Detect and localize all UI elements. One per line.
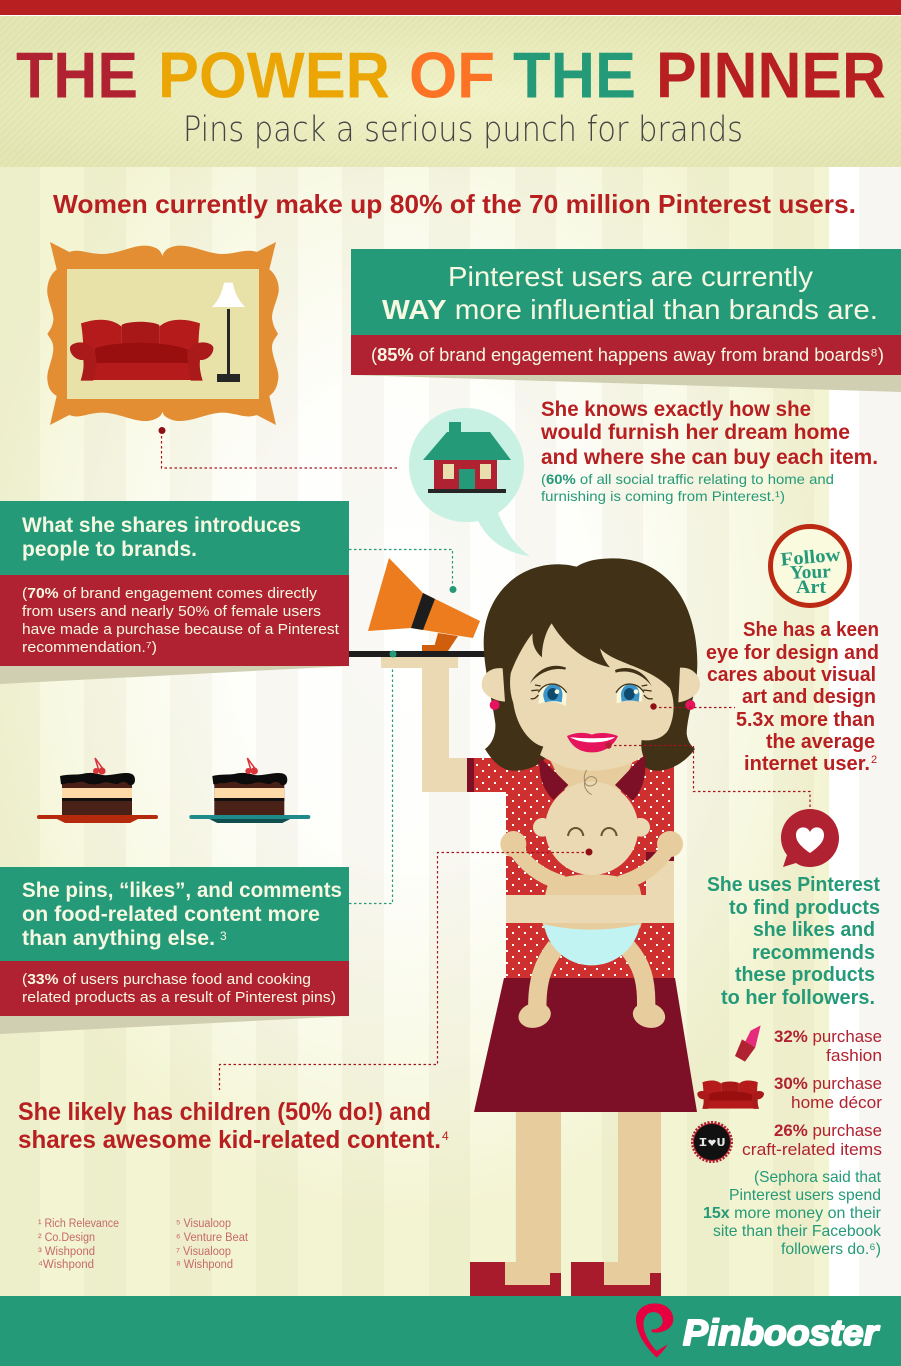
followers text: She uses Pinterest [707,874,880,896]
badge: follow your art [770,526,850,606]
neck [550,760,633,793]
purchase stats: 32% purchase [774,1027,882,1046]
footnotes: ⁶ Venture Beat [176,1232,249,1244]
logo wordmark: Pinbooster [683,1312,880,1353]
baby body [542,874,643,932]
header band [0,16,901,167]
megaphone [368,558,480,651]
icon: I love you badge: I♥U [698,1137,726,1150]
badge: follow your art: Your [789,561,832,584]
footnotes: ⁵ Visualoop [176,1218,231,1230]
dotted connector: frame to house [158,427,398,468]
band text: WAY more influential than brands are. [382,294,878,325]
dotted connector: shares to megaphone [349,550,456,593]
panel heading: people to brands. [22,538,197,561]
panel body: from users and nearly 50% of female users [22,603,321,620]
panel shadow [0,666,349,684]
purchase stats [742,1027,882,1159]
diaper [544,924,640,965]
food body: (33% of users purchase food and cooking [22,971,311,988]
left eye [531,684,567,706]
speech bubble with house [409,408,530,556]
head [482,558,700,801]
dream home text: She knows exactly how she [541,398,811,421]
ears [482,668,505,702]
icon: small sofa [697,1081,764,1109]
icon: I love you badge [693,1123,731,1161]
legs and shoes [470,1112,661,1296]
purchase stats: home décor [791,1093,882,1112]
dot on arm connector [390,650,396,658]
baby legs [537,947,646,1010]
panel body: (70% of brand engagement comes directly [22,585,318,602]
visual art text: internet user. [744,753,870,775]
raised arm and tray [349,651,489,792]
panel body: have made a purchase because of a Pinterest [22,621,340,638]
panel: what she shares [0,501,349,684]
footnotes: ² Co.Design [38,1232,95,1244]
dream home text: would furnish her dream home [540,421,850,444]
headline: Women currently make up 80% of the 70 million Pinterest users. [53,189,856,219]
floor lamp [212,283,245,382]
green band: influence [351,249,901,392]
badge: follow your art: Follow [780,544,842,571]
logo pin [636,1303,673,1358]
visual art text: eye for design and [706,642,879,664]
eyebrows [530,666,566,683]
panel body: recommendation.⁷) [22,639,157,656]
children text: shares awesome kid-related content. [18,1126,441,1154]
purchase stats: craft-related items [742,1140,882,1159]
visual art text: She has a keen [743,619,879,641]
right eye [616,683,653,703]
visual art text [706,619,879,775]
sephora note [703,1169,882,1258]
food panel shadow [0,1016,349,1034]
dream home text [540,398,878,504]
title: POWER [158,38,390,112]
bubble [409,408,530,556]
dream home text: (60% of all social traffic relating to home and [541,471,834,487]
footnotes: ⁴Wishpond [38,1259,94,1271]
baby feet [516,999,553,1031]
footnotes: ¹ Rich Relevance [38,1218,119,1230]
followers text: recommends [752,942,875,964]
food heading [22,879,342,950]
baby arms [513,845,670,883]
food heading: She pins, “likes”, and comments [22,879,342,902]
followers text: she likes and [753,919,875,941]
sephora note: site than their Facebook [713,1223,882,1240]
food heading: 3 [220,929,227,943]
dotted connector: lips to heart [605,742,810,808]
polka dot blouse [474,758,674,978]
top bar [0,0,901,15]
sephora note: (Sephora said that [754,1169,882,1186]
title: PINNER [656,38,886,112]
dream home text: furnishing is coming from Pinterest.¹) [541,488,785,504]
woman figure [349,558,700,1296]
carrying arm [646,852,674,896]
sephora note: Pinterest users spend [729,1187,881,1204]
followers text: these products [735,964,875,986]
frame [47,242,279,425]
earrings [490,700,500,710]
subtitle: Pins pack a serious punch for brands [183,110,743,150]
footnotes: ⁸ Wishpond [176,1259,233,1271]
footnotes: ⁷ Visualoop [176,1246,231,1258]
face [510,623,674,771]
footnotes: ³ Wishpond [38,1246,95,1258]
band shadow [351,375,901,392]
followers text: to her followers. [721,987,875,1009]
band text: Pinterest users are currently [448,261,813,292]
panel heading: What she shares introduces [22,514,301,537]
dotted connector: baby to children text [220,848,592,1090]
baby head [533,770,650,875]
children text: 4 [442,1129,449,1143]
dotted connector: cheek to art text [650,703,735,710]
icon: lipstick [735,1025,761,1062]
cake: red plate [37,758,158,823]
hair [484,558,697,771]
panel body [22,585,340,656]
followers text: to find products [729,897,880,919]
footer band [0,1296,901,1366]
baby [500,770,683,1031]
visual art text: the average [766,731,875,753]
food heading: on food-related content more [22,903,320,926]
sephora note: 15x more money on their [703,1205,882,1222]
sofa [70,320,213,381]
food heading: than anything else. [22,927,215,950]
collar [539,757,568,800]
visual art text: cares about visual [707,664,876,686]
purchase stats: 26% purchase [774,1121,882,1140]
title: THE [16,38,138,112]
panel: food content [0,867,349,1034]
title: OF [409,38,495,112]
visual art text: art and design [742,686,876,708]
icon: heart bubble [781,809,839,867]
badge: follow your art: Art [796,577,827,598]
sleeve cuff [646,852,674,861]
sephora note: followers do.⁶) [781,1241,881,1258]
children text [18,1098,449,1154]
cake: teal plate [189,758,310,823]
footnotes [38,1218,249,1271]
purchase stats: 30% purchase [774,1074,882,1093]
visual art text: 2 [871,754,877,766]
panel heading [22,514,301,561]
lips [567,733,618,752]
picture frame with sofa and lamp [47,242,279,425]
house icon [423,422,511,493]
food body: related products as a result of Pinterest pins) [22,989,336,1006]
purchase stats: fashion [826,1046,882,1065]
dream home text: and where she can buy each item. [541,446,878,469]
band text: (85% of brand engagement happens away from brand boards⁸) [371,344,884,365]
visual art text: 5.3x more than [736,709,875,731]
mother's arm strap [506,895,674,923]
cakes [37,758,310,823]
dotted connector: food to tray [349,654,392,904]
skirt [474,978,697,1112]
band text [371,261,884,365]
food body [22,971,336,1006]
children text: She likely has children (50% do!) and [18,1098,431,1126]
title: THE [513,38,636,112]
followers text [707,874,880,1009]
picture background [67,269,259,399]
